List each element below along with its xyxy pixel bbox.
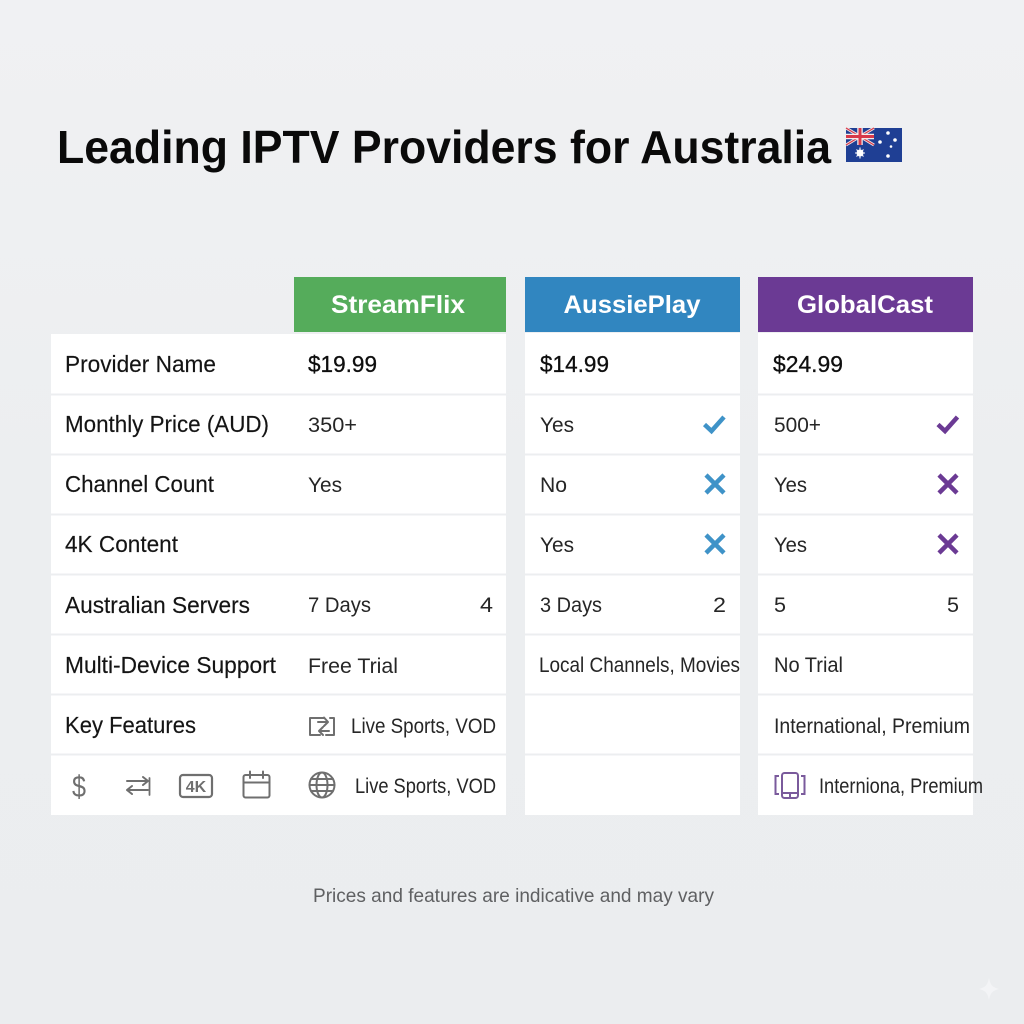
AussiePlay values: Yes: [540, 533, 574, 557]
StreamFlix values: $19.99: [308, 351, 377, 377]
icon: blue check: [704, 417, 724, 431]
GlobalCast values: Interniona, Premium: [819, 774, 983, 798]
GlobalCast values: No Trial: [774, 653, 843, 677]
panel: row labels and StreamFlix column: [51, 277, 506, 815]
row labels: Monthly Price (AUD): [65, 411, 269, 437]
StreamFlix values: 4: [480, 593, 493, 617]
AussiePlay values: 3 Days: [540, 593, 602, 617]
header: StreamFlix: [294, 277, 506, 332]
GlobalCast values: Yes: [774, 533, 807, 557]
panel: AussiePlay column: [525, 277, 740, 815]
StreamFlix values: Live Sports, VOD: [355, 774, 496, 798]
StreamFlix values: [308, 351, 496, 798]
AussiePlay values: [539, 351, 740, 677]
StreamFlix values: 350+: [308, 413, 357, 437]
icon: purple check: [938, 417, 958, 431]
row labels: Key Features: [65, 712, 196, 738]
icon: streaming screen with arrows: [310, 718, 334, 735]
icon: transfer arrows: [127, 777, 150, 795]
AussiePlay values: Yes: [540, 413, 574, 437]
title: Leading IPTV Providers for Australia: [57, 121, 831, 173]
GlobalCast values: International, Premium: [774, 714, 970, 738]
header: AussiePlay: AussiePlay: [564, 291, 701, 319]
footnote: Prices and features are indicative and may vary: [313, 885, 714, 907]
icon: 4K badge: [180, 775, 212, 797]
icon: 4K badge: 4K: [186, 779, 207, 796]
icon: dollar: $: [72, 769, 86, 804]
AussiePlay values: Local Channels, Movies: [539, 653, 740, 677]
row labels: Australian Servers: [65, 592, 250, 618]
StreamFlix values: 7 Days: [308, 593, 371, 617]
row labels: Provider Name: [65, 351, 216, 377]
row labels: 4K Content: [65, 531, 179, 557]
icon: blue cross, no: [706, 475, 724, 493]
GlobalCast values: 5: [774, 593, 786, 617]
icon: calendar: [244, 772, 270, 798]
icon: Australian flag: [846, 128, 902, 162]
GlobalCast values: [773, 351, 983, 798]
StreamFlix values: Free Trial: [308, 654, 398, 678]
header: GlobalCast: GlobalCast: [797, 291, 934, 319]
AussiePlay values: $14.99: [540, 351, 609, 377]
row labels: [65, 351, 277, 738]
GlobalCast values: Yes: [774, 473, 807, 497]
AussiePlay values: No: [540, 473, 567, 497]
header: StreamFlix: StreamFlix: [331, 291, 465, 319]
row labels: Channel Count: [65, 471, 215, 497]
icon: blue cross, yes: [706, 535, 724, 553]
GlobalCast values: 5: [947, 593, 959, 617]
GlobalCast values: $24.99: [773, 351, 843, 377]
icon: multi-device: [776, 773, 804, 798]
row labels: Multi-Device Support: [65, 652, 277, 678]
icon: purple cross, channels: [939, 475, 957, 493]
StreamFlix values: Yes: [308, 473, 342, 497]
icon: globe: [310, 772, 334, 798]
AussiePlay values: 2: [713, 593, 726, 617]
panel: GlobalCast column: [758, 277, 983, 815]
GlobalCast values: 500+: [774, 413, 821, 437]
header: GlobalCast: [758, 277, 973, 332]
icon: sparkle watermark: [979, 978, 999, 1000]
icon: purple cross, 4K: [939, 535, 957, 553]
StreamFlix values: Live Sports, VOD: [351, 714, 496, 738]
header: AussiePlay: [525, 277, 740, 332]
